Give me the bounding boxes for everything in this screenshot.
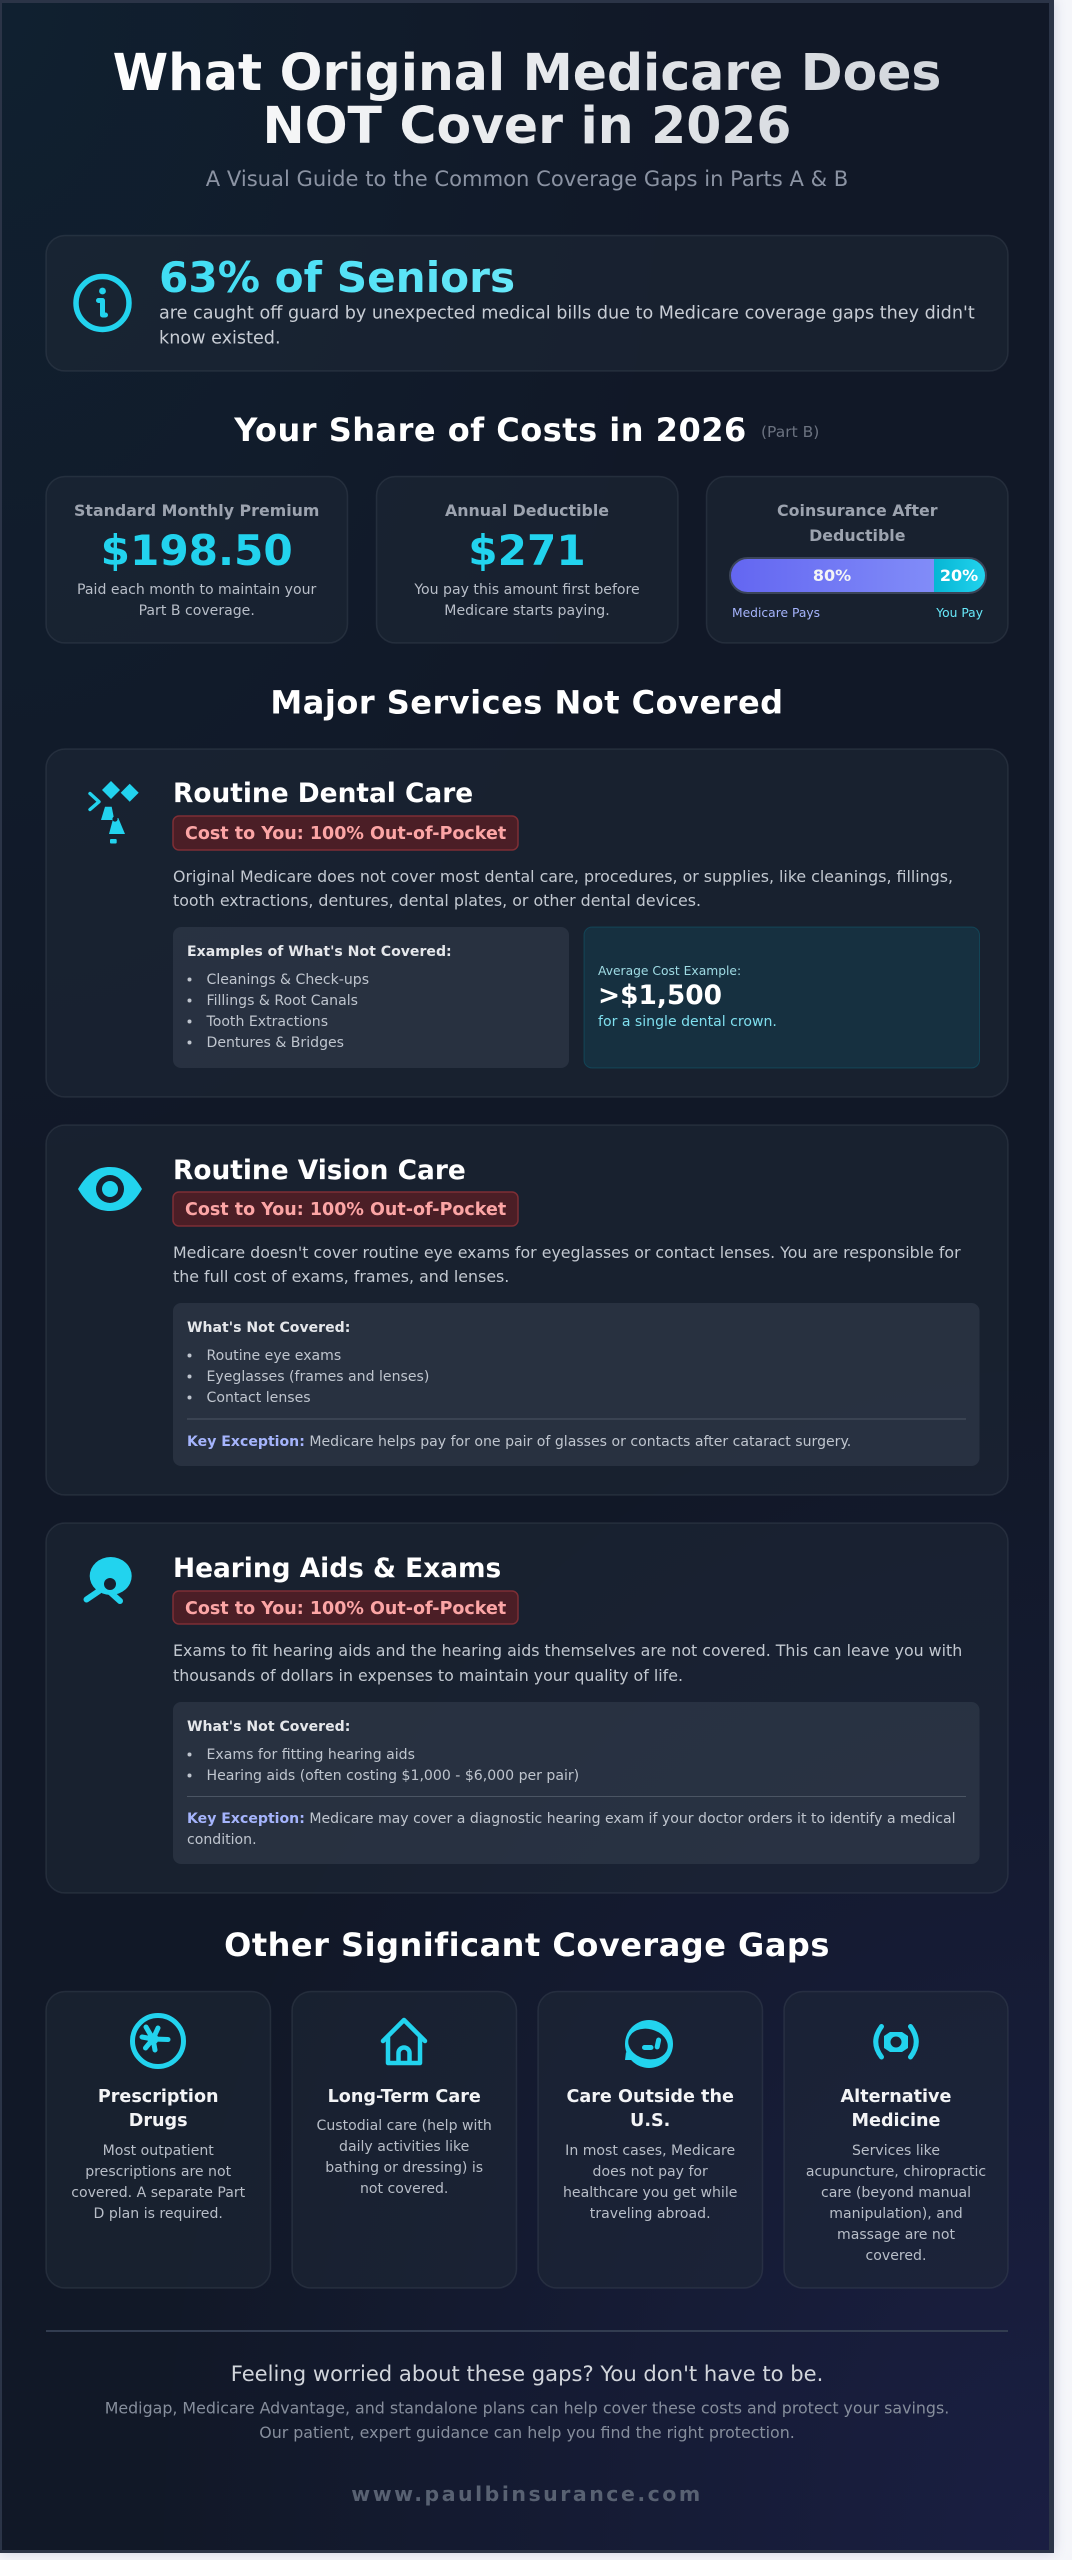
panel: alternative medicine — [784, 1992, 1008, 2288]
stacked bar: 80% / 20%: 80% — [813, 566, 851, 585]
list box: what's not covered: condition. — [187, 1832, 257, 1848]
service description: Original Medicare does not cover most dental care, procedures, or supplies, like cleanings, fillings, — [173, 867, 953, 886]
service description: Medicare doesn't cover routine eye exams for eyeglasses or contact lenses. You are responsible for — [173, 1243, 961, 1262]
card description: Services like — [852, 2143, 940, 2159]
icon: tooth — [90, 781, 139, 844]
card description: You pay this amount first before — [413, 582, 640, 598]
panel: hearing aids and exams — [46, 1523, 1008, 1893]
list box: what's not covered — [173, 1702, 980, 1864]
card description: traveling abroad. — [590, 2206, 711, 2222]
heading: major services: Major Services Not Covered — [270, 684, 784, 722]
card description: covered. — [866, 2248, 926, 2264]
list box: what's not covered: Eyeglasses (frames and lenses) — [206, 1369, 429, 1385]
footer: supporting text: Medigap, Medicare Advantage, and standalone plans can help cover these costs and protect your savings. — [105, 2398, 949, 2418]
panel: coinsurance — [706, 476, 1008, 643]
card title: Long-Term Care — [328, 2087, 481, 2107]
service description: Exams to fit hearing aids and the hearing aids themselves are not covered. This can leave you with — [173, 1641, 962, 1660]
card label: Coinsurance After — [777, 501, 938, 520]
icon: eye — [78, 1167, 142, 1211]
card value: $198.50 — [101, 526, 293, 575]
list box: what's not covered: Medicare may cover a diagnostic hearing exam if your doctor orders it to identify a medical — [305, 1811, 956, 1827]
cost badge: Cost to You: 100% Out-of-Pocket — [185, 824, 506, 844]
statistic heading: 63% of Seniors — [159, 253, 515, 302]
cost badge — [173, 816, 518, 850]
list box: examples not covered: Fillings & Root Canals — [206, 993, 358, 1009]
list box: what's not covered: Hearing aids (often costing $1,000 - $6,000 per pair) — [206, 1768, 579, 1784]
callout: average cost example — [584, 927, 980, 1068]
panel: prescription drugs — [46, 1992, 270, 2288]
list box: examples not covered: Cleanings & Check-ups — [206, 972, 369, 988]
card description: not covered. — [360, 2181, 448, 2197]
bar label: you pay: You Pay — [935, 606, 983, 620]
card label: Deductible — [809, 526, 905, 545]
card value: $271 — [468, 526, 586, 575]
card description: D plan is required. — [94, 2206, 223, 2222]
cost badge — [173, 1192, 518, 1226]
cost badge: Cost to You: 100% Out-of-Pocket — [185, 1599, 506, 1619]
bar label: medicare pays: Medicare Pays — [732, 606, 820, 620]
panel: annual deductible — [376, 476, 678, 643]
card description: Paid each month to maintain your — [77, 582, 317, 598]
list box: what's not covered: Key Exception: Medicare helps pay for one pair of glasses or contacts after cataract surgery. — [187, 1434, 851, 1450]
card title: Alternative — [841, 2087, 952, 2107]
list box: examples not covered: Examples of What's Not Covered: — [187, 944, 452, 960]
statistic description: are caught off guard by unexpected medical bills due to Medicare coverage gaps they didn't — [159, 304, 975, 324]
service heading: Routine Vision Care — [173, 1155, 466, 1186]
card description: does not pay for — [593, 2164, 708, 2180]
panel: routine dental care — [46, 749, 1008, 1097]
cost badge: Cost to You: 100% Out-of-Pocket — [185, 1200, 506, 1220]
service heading: Routine Dental Care — [173, 778, 473, 809]
list box: examples not covered — [173, 927, 569, 1068]
heading: your share of costs: Your Share of Costs in 2026 — [233, 411, 747, 449]
icon: ear — [86, 1557, 132, 1601]
list box: what's not covered — [173, 1303, 980, 1466]
callout: average cost example: for a single dental crown. — [598, 1014, 777, 1030]
card title: Prescription — [98, 2087, 219, 2107]
card description: bathing or dressing) is — [325, 2160, 483, 2176]
card description: massage are not — [837, 2227, 955, 2243]
callout: average cost example: Average Cost Example: — [598, 964, 741, 978]
footer: reassurance line: Feeling worried about these gaps? You don't have to be. — [231, 2361, 823, 2386]
card description: In most cases, Medicare — [565, 2143, 735, 2159]
callout: average cost example: >$1,500 — [598, 980, 722, 1011]
list box: what's not covered: Routine eye exams — [206, 1348, 341, 1364]
list box: what's not covered: What's Not Covered: — [187, 1320, 350, 1336]
card description: Most outpatient — [103, 2143, 214, 2159]
card label: Annual Deductible — [445, 501, 609, 520]
card label: Standard Monthly Premium — [74, 501, 319, 520]
statistic description: know existed. — [159, 328, 281, 348]
service description: thousands of dollars in expenses to maintain your quality of life. — [173, 1666, 683, 1685]
icon: house — [383, 2020, 425, 2063]
heading note: part B: (Part B) — [761, 423, 819, 441]
card description: Medicare starts paying. — [444, 603, 610, 619]
panel: 63% of seniors callout — [46, 236, 1008, 371]
card description: daily activities like — [339, 2139, 469, 2155]
icon: info — [76, 276, 129, 330]
list box: examples not covered: Tooth Extractions — [206, 1014, 328, 1030]
card title: Drugs — [129, 2111, 188, 2131]
subtitle: A Visual Guide to the Common Coverage Gaps in Parts A & B — [206, 166, 848, 191]
heading: other coverage gaps: Other Significant Coverage Gaps — [224, 1926, 830, 1964]
card title: Care Outside the — [566, 2087, 734, 2107]
card description: care (beyond manual — [821, 2185, 971, 2201]
card description: Part B coverage. — [139, 603, 255, 619]
card description: acupuncture, chiropractic — [806, 2164, 986, 2180]
panel: long-term care — [292, 1992, 516, 2288]
list box: what's not covered: Contact lenses — [206, 1390, 311, 1406]
list box: examples not covered: Dentures & Bridges — [206, 1035, 344, 1051]
list box: what's not covered: Exams for fitting hearing aids — [206, 1747, 415, 1763]
stacked bar: 80% / 20% — [730, 558, 986, 593]
card description: manipulation), and — [829, 2206, 963, 2222]
footer: supporting text: Our patient, expert guidance can help you find the right protection. — [259, 2423, 795, 2442]
card description: prescriptions are not — [85, 2164, 232, 2180]
icon: signal waves — [876, 2026, 916, 2057]
icon: pill asterisk — [132, 2016, 184, 2066]
title: What Original Medicare Does — [113, 43, 941, 102]
title: NOT Cover in 2026 — [263, 96, 791, 155]
card title: U.S. — [630, 2111, 670, 2131]
service description: the full cost of exams, frames, and lenses. — [173, 1267, 509, 1286]
cost badge — [173, 1591, 518, 1624]
card description: Custodial care (help with — [317, 2118, 492, 2134]
list box: what's not covered: Key Exception: — [187, 1811, 305, 1827]
panel: standard monthly premium — [46, 476, 348, 643]
stacked bar: 80% / 20%: 20% — [940, 566, 978, 585]
service heading: Hearing Aids & Exams — [173, 1553, 501, 1584]
footer: website: www.paulbinsurance.com — [351, 2482, 703, 2506]
service description: tooth extractions, dentures, dental plates, or other dental devices. — [173, 891, 701, 910]
icon: globe — [625, 2020, 673, 2068]
panel: care outside the U.S. — [538, 1992, 762, 2288]
card description: covered. A separate Part — [71, 2185, 246, 2201]
card description: healthcare you get while — [563, 2185, 737, 2201]
card title: Medicine — [852, 2111, 941, 2131]
panel: routine vision care — [46, 1125, 1008, 1495]
list box: what's not covered: What's Not Covered: — [187, 1719, 350, 1735]
